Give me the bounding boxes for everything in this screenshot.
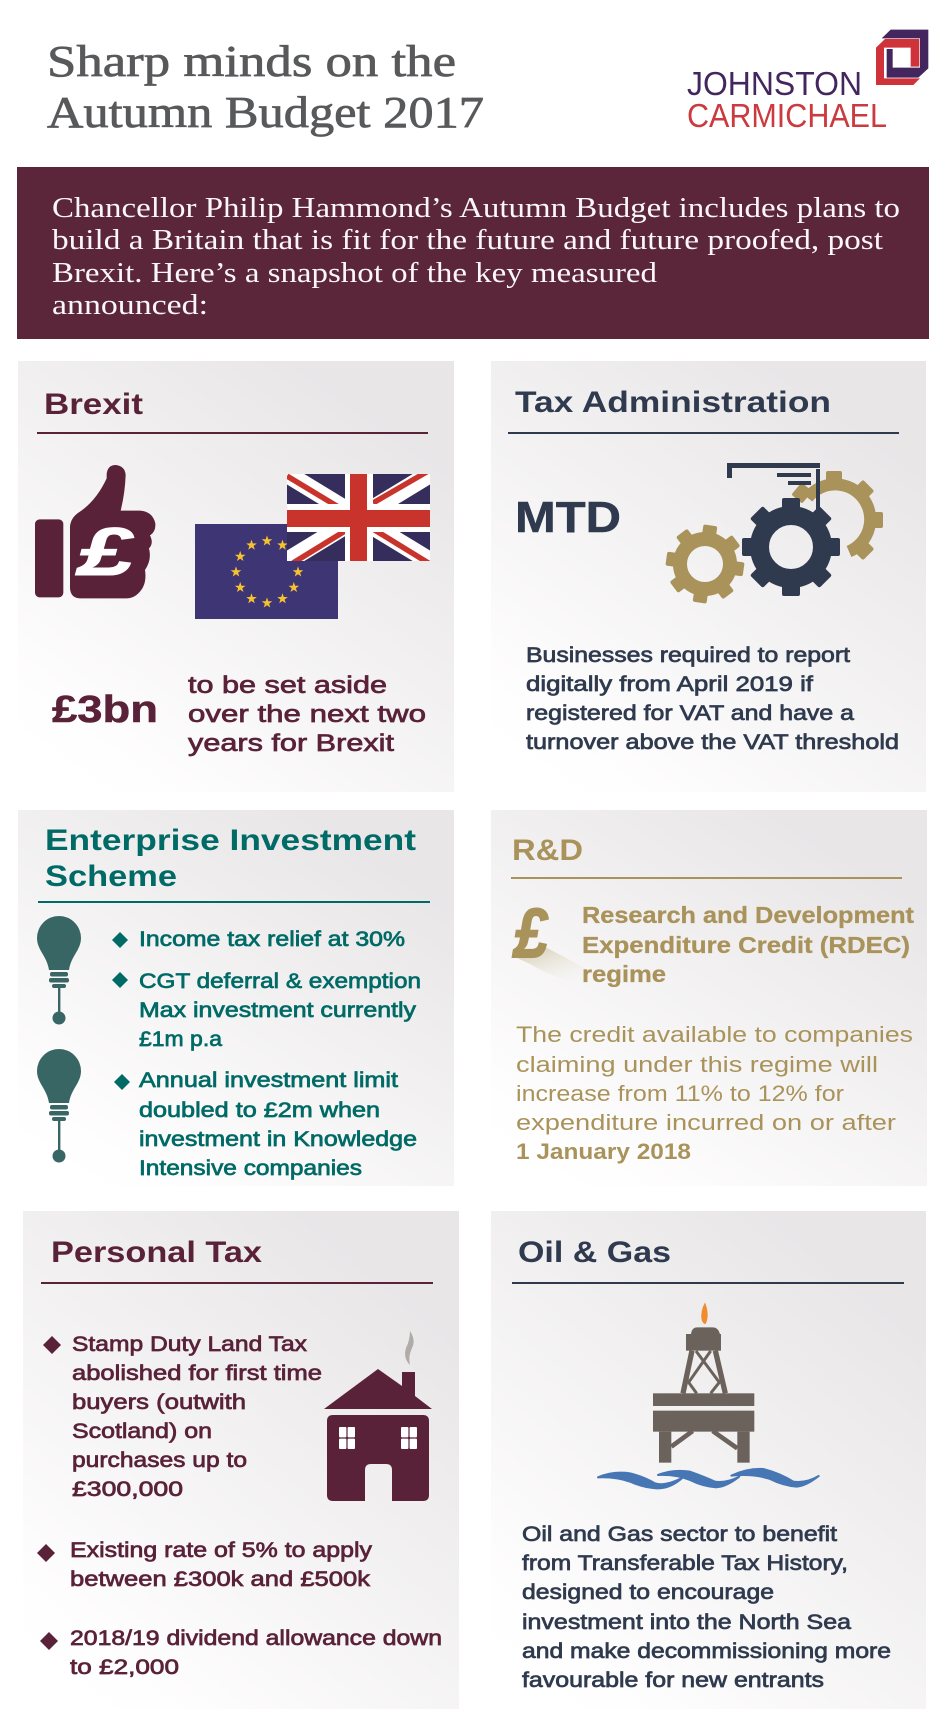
logo wordmark: CARMICHAEL bbox=[687, 97, 887, 134]
banner text: Chancellor Philip Hammond’s Autumn Budget includes plans to bbox=[52, 193, 900, 224]
bullet list: personal tax points: Existing rate of 5% to apply bbox=[70, 1539, 373, 1562]
bullet list: personal tax points: Scotland) on bbox=[72, 1420, 212, 1443]
text: Brexit description bbox=[188, 672, 426, 757]
heading: Enterprise Investment Scheme: Scheme bbox=[45, 860, 177, 893]
text: oil and gas description: from Transferable Tax History, bbox=[522, 1552, 848, 1575]
stat: £3bn: £3bn bbox=[52, 689, 158, 731]
bullet list: personal tax points: buyers (outwith bbox=[72, 1391, 246, 1414]
text: MTD description: turnover above the VAT threshold bbox=[526, 731, 899, 754]
panel: Enterprise Investment Scheme bbox=[18, 810, 454, 1186]
text: MTD description: Businesses required to report bbox=[526, 644, 850, 667]
banner text: announced: bbox=[52, 290, 208, 321]
bullet list: personal tax points: between £300k and £500k bbox=[70, 1568, 371, 1591]
icon: pound sign with reflection: £ bbox=[512, 894, 549, 972]
heading: Enterprise Investment Scheme: Enterprise Investment bbox=[45, 824, 416, 857]
banner text: Brexit. Here’s a snapshot of the key measured bbox=[52, 258, 657, 289]
bullet list: personal tax points: Stamp Duty Land Tax bbox=[72, 1333, 308, 1356]
title: Autumn Budget 2017 bbox=[47, 88, 484, 137]
title: Sharp minds on the bbox=[47, 37, 456, 86]
heading: Brexit: Brexit bbox=[44, 388, 143, 421]
banner text bbox=[52, 193, 900, 321]
text: Brexit description: over the next two bbox=[188, 701, 426, 728]
text: MTD description: digitally from April 2019 if bbox=[526, 673, 813, 696]
text: RDEC subheading: regime bbox=[582, 961, 666, 987]
bullet list: EIS points: Annual investment limit bbox=[139, 1069, 398, 1092]
text: MTD description bbox=[526, 644, 899, 754]
text: RDEC subheading: Research and Development bbox=[582, 902, 914, 928]
bullet list: personal tax points bbox=[37, 1333, 442, 1679]
panel: Tax Administration bbox=[491, 361, 926, 792]
text: oil and gas description bbox=[522, 1523, 891, 1692]
text: oil and gas description: and make decommissioning more bbox=[522, 1640, 891, 1663]
text: RDEC description: expenditure incurred on or after bbox=[516, 1110, 896, 1135]
panel: Oil & Gas bbox=[491, 1211, 926, 1709]
bullet list: EIS points: investment in Knowledge bbox=[139, 1128, 417, 1151]
bullet list: EIS points: £1m p.a bbox=[139, 1028, 222, 1051]
icon: pound sign with reflection bbox=[512, 894, 605, 982]
label: MTD: MTD bbox=[515, 493, 621, 542]
text: oil and gas description: Oil and Gas sector to benefit bbox=[522, 1523, 837, 1546]
heading: Tax Administration: Tax Administration bbox=[515, 386, 831, 419]
icon: oil rig on water bbox=[598, 1302, 819, 1488]
icon: thumbs up with pound sign bbox=[35, 465, 155, 598]
bullet list: EIS points: Income tax relief at 30% bbox=[139, 928, 405, 951]
icon: house bbox=[324, 1331, 432, 1501]
bullet list: personal tax points: 2018/19 dividend allowance down bbox=[70, 1627, 442, 1650]
panel: Brexit bbox=[18, 361, 454, 792]
text: MTD description: registered for VAT and have a bbox=[526, 702, 854, 725]
panel: R&D bbox=[491, 810, 927, 1186]
logo: Johnston Carmichael bbox=[687, 30, 928, 134]
panel: Personal Tax bbox=[23, 1211, 459, 1709]
bullet list: EIS points: Max investment currently bbox=[139, 999, 417, 1022]
panel: intro banner bbox=[17, 167, 929, 339]
banner text: build a Britain that is fit for the future and future proofed, post bbox=[52, 225, 883, 256]
bullet list: personal tax points: £300,000 bbox=[72, 1478, 183, 1501]
text: Brexit description: to be set aside bbox=[188, 672, 387, 699]
text: RDEC description bbox=[516, 1022, 913, 1164]
logo wordmark: JOHNSTON bbox=[687, 65, 862, 102]
icon: light bulb 1 bbox=[37, 916, 81, 1024]
text: RDEC description: 1 January 2018 bbox=[516, 1139, 691, 1164]
text: RDEC subheading: Expenditure Credit (RDEC) bbox=[582, 932, 910, 958]
bullet list: EIS points bbox=[112, 928, 421, 1180]
icon: UK flag bbox=[287, 470, 430, 564]
text: RDEC description: increase from 11% to 12% for bbox=[516, 1081, 844, 1106]
title bbox=[47, 37, 484, 137]
logo wordmark bbox=[687, 65, 887, 134]
text: RDEC subheading bbox=[582, 902, 914, 987]
bullet list: EIS points: CGT deferral & exemption bbox=[139, 970, 421, 993]
icon: thumbs up with pound sign: £ bbox=[75, 514, 134, 590]
bullet list: EIS points: doubled to £2m when bbox=[139, 1099, 380, 1122]
bullet list: EIS points: Intensive companies bbox=[139, 1157, 362, 1180]
text: RDEC description: The credit available to companies bbox=[516, 1022, 913, 1047]
icon: light bulb 2 bbox=[37, 1049, 81, 1162]
icon: gears bbox=[665, 463, 883, 604]
text: RDEC description: claiming under this regime will bbox=[516, 1052, 878, 1077]
heading: Personal Tax: Personal Tax bbox=[51, 1236, 262, 1269]
bullet list: personal tax points: to £2,000 bbox=[70, 1656, 179, 1679]
text: oil and gas description: favourable for new entrants bbox=[522, 1669, 824, 1692]
icon: logo mark bbox=[876, 30, 928, 85]
bullet list: personal tax points: purchases up to bbox=[72, 1449, 247, 1472]
text: oil and gas description: designed to encourage bbox=[522, 1581, 774, 1604]
icon: EU flag bbox=[195, 524, 338, 619]
heading: R&D: R&D bbox=[512, 834, 583, 867]
heading: Oil & Gas: Oil & Gas bbox=[518, 1236, 671, 1269]
bullet list: personal tax points: abolished for first time bbox=[72, 1362, 322, 1385]
text: Brexit description: years for Brexit bbox=[188, 730, 394, 757]
text: oil and gas description: investment into the North Sea bbox=[522, 1611, 851, 1634]
heading: Enterprise Investment Scheme bbox=[45, 824, 416, 893]
